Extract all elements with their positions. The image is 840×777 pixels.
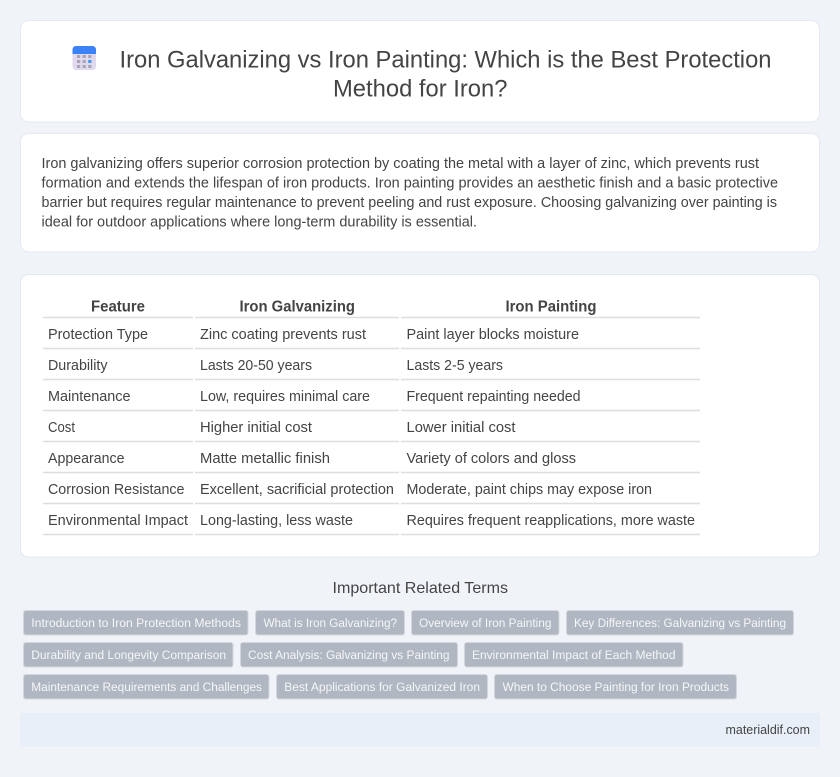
table row: environmental impact: Requires frequent reapplications, more waste [406, 513, 695, 529]
tag [566, 610, 794, 635]
tag [256, 610, 404, 635]
table row: maintenance: Low, requires minimal care [200, 389, 370, 405]
tag [464, 642, 683, 667]
tag: Durability and Longevity Comparison [31, 648, 226, 662]
footer text: materialdif.com [726, 722, 810, 737]
table row: environmental impact: Environmental Impact [48, 513, 188, 529]
title: Iron Galvanizing vs Iron Painting: Which is the Best Protection [120, 46, 772, 74]
table row: protection type: Zinc coating prevents rust [200, 327, 366, 343]
table row: maintenance: Maintenance [48, 389, 130, 405]
table row: cost: Higher initial cost [200, 420, 312, 436]
panel: introduction text [20, 134, 820, 252]
tag [412, 610, 559, 635]
table row: appearance [48, 451, 576, 467]
tag [24, 610, 248, 635]
table row: maintenance: Frequent repainting needed [406, 389, 580, 405]
tag: Best Applications for Galvanized Iron [284, 680, 480, 694]
table row: appearance: Variety of colors and gloss [406, 451, 576, 467]
table header: Iron Galvanizing [240, 298, 355, 316]
title [120, 46, 772, 102]
tag [24, 642, 233, 667]
text block: introduction: barrier but requires regular maintenance to prevent peeling and rust exposure. Choosing galvanizing over painting is [42, 195, 777, 211]
title: Method for Iron? [333, 76, 508, 102]
tag [276, 674, 488, 699]
table row: protection type [48, 327, 579, 343]
table row: appearance: Matte metallic finish [200, 451, 330, 467]
table row: protection type: Protection Type [48, 327, 148, 343]
text block: introduction [42, 156, 778, 230]
tag: What is Iron Galvanizing? [264, 616, 397, 630]
panel: comparison table [20, 274, 820, 557]
table row: durability: Lasts 20-50 years [200, 358, 312, 374]
table row: environmental impact: Long-lasting, less waste [200, 513, 353, 529]
footer bar [20, 713, 820, 747]
table row: maintenance [48, 389, 580, 405]
tag [494, 674, 736, 699]
tag [240, 642, 458, 667]
tag: Introduction to Iron Protection Methods [31, 616, 241, 630]
table row: cost: Lower initial cost [406, 420, 516, 436]
panel: title card [20, 20, 820, 122]
panel: related term tags [24, 610, 794, 699]
tag: Overview of Iron Painting [419, 616, 552, 630]
text block: introduction: Iron galvanizing offers superior corrosion protection by coating the metal with a layer of zinc, which prevents rust [42, 156, 759, 172]
tag: Environmental Impact of Each Method [472, 648, 676, 662]
table row: durability [48, 358, 503, 374]
table row: appearance: Appearance [48, 451, 124, 467]
table header [91, 298, 596, 316]
text block: introduction: ideal for outdoor applications where long-term durability is essential. [42, 214, 477, 230]
tag: When to Choose Painting for Iron Products [502, 680, 729, 694]
table row: corrosion resistance: Corrosion Resistance [48, 482, 184, 498]
tag [24, 674, 269, 699]
table row: corrosion resistance [48, 482, 652, 498]
tag: Cost Analysis: Galvanizing vs Painting [248, 648, 450, 662]
table row: corrosion resistance: Moderate, paint chips may expose iron [406, 482, 652, 498]
table row: cost [48, 420, 516, 436]
table row: corrosion resistance: Excellent, sacrificial protection [200, 482, 394, 498]
table header: Feature [91, 298, 145, 316]
heading: important related terms: Important Related Terms [332, 580, 508, 597]
table row: cost: Cost [48, 420, 75, 436]
tag: Key Differences: Galvanizing vs Painting [574, 616, 786, 630]
table header: Iron Painting [506, 298, 596, 316]
table row: durability: Durability [48, 358, 108, 374]
icon: calendar [72, 46, 96, 70]
table row: environmental impact [48, 513, 695, 529]
text block: introduction: formation and extends the lifespan of iron products. Iron painting provides an aesthetic finish and a basic protective [42, 176, 778, 192]
table row: protection type: Paint layer blocks moisture [406, 327, 579, 343]
tag: Maintenance Requirements and Challenges [31, 680, 262, 694]
table row: durability: Lasts 2-5 years [406, 358, 503, 374]
